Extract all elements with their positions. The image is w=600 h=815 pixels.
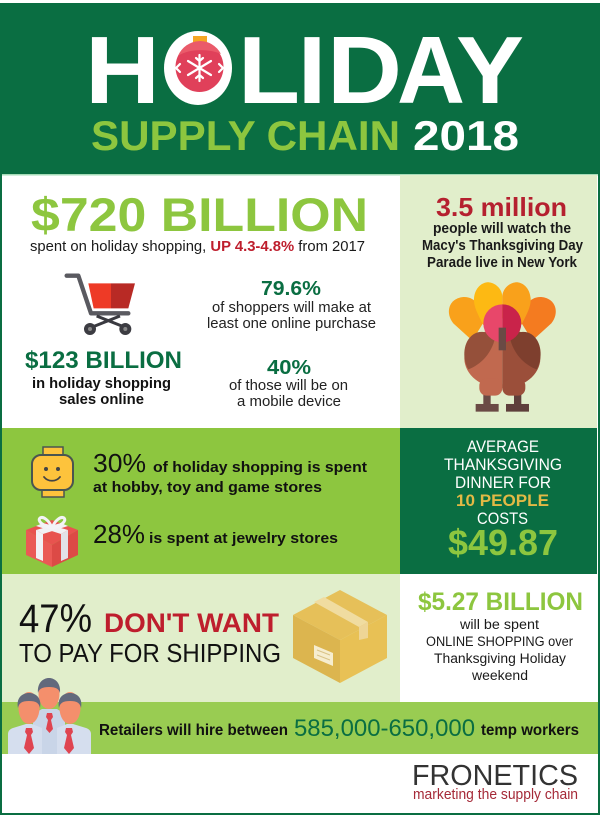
text: online shopping weekend: will be spent <box>459 617 539 632</box>
stat: $123 billion: $123 BILLION <box>25 347 182 374</box>
stat: 40%: a mobile device <box>237 394 341 410</box>
subtitle: SUPPLY CHAIN 2018: 2018 <box>413 112 519 159</box>
logo: Fronetics: FRONETICS <box>412 760 578 792</box>
title: HOLIDAY: I <box>298 17 326 124</box>
stat: 40%: 40% <box>267 357 311 379</box>
text: temp workers hiring: 585,000-650,000 <box>294 715 475 742</box>
stat: 40%: of those will be on <box>229 378 348 394</box>
text: parade viewers: Macy's Thanksgiving Day <box>422 238 583 254</box>
stat: 28% jewelry stores: 28% <box>93 519 145 549</box>
icon: gift box <box>26 517 78 567</box>
panel: Thanksgiving dinner cost: THANKSGIVING <box>444 456 562 474</box>
text: parade viewers: people will watch the <box>433 221 571 237</box>
panel: shipping <box>2 570 400 703</box>
stat: 79.6%: of shoppers will make at <box>212 300 371 316</box>
stat: 30% hobby toy game stores: 30% <box>93 448 146 478</box>
stat: $123 billion <box>25 347 182 408</box>
panel: header <box>2 3 598 174</box>
panel: store spending <box>2 428 400 574</box>
text: online shopping weekend <box>426 617 573 683</box>
text: temp workers hiring: Retailers will hire between <box>99 722 288 739</box>
title: HOLIDAY: L <box>238 17 300 124</box>
stat: 30% hobby toy game stores <box>93 448 367 496</box>
stat: 79.6% <box>207 278 376 332</box>
stat: 47% don't want <box>19 597 281 668</box>
icon: toy head <box>32 447 73 497</box>
panel: Thanksgiving dinner cost: DINNER FOR <box>455 474 551 492</box>
text: spent on holiday shopping: spent on holiday shopping, UP 4.3-4.8% from 2017 <box>30 239 365 255</box>
title: HOLIDAY: H <box>85 17 160 124</box>
icon: shopping cart <box>67 276 135 335</box>
panel: Thanksgiving dinner cost <box>400 428 597 574</box>
subtitle: SUPPLY CHAIN 2018: SUPPLY CHAIN <box>91 112 400 159</box>
stat: 40% <box>229 357 348 410</box>
title: HOLIDAY <box>85 17 524 124</box>
icon: cardboard box <box>293 590 387 683</box>
panel: online shopping weekend <box>400 570 597 703</box>
logo: Fronetics: marketing the supply chain <box>413 786 578 803</box>
title: HOLIDAY: A <box>397 17 465 124</box>
text: online shopping weekend: ONLINE SHOPPING over <box>426 634 573 649</box>
stat: 47% don't want: 47% <box>19 597 92 641</box>
panel: Thanksgiving dinner cost: COSTS <box>477 510 528 528</box>
stat: 79.6%: 79.6% <box>261 278 321 300</box>
panel: Thanksgiving dinner cost: AVERAGE <box>467 438 539 456</box>
stat: 30% hobby toy game stores: of holiday shopping is spent <box>153 459 367 476</box>
title: HOLIDAY: Y <box>456 17 524 124</box>
panel: Thanksgiving dinner cost: 10 PEOPLE <box>456 492 549 510</box>
icon: three workers <box>8 678 91 754</box>
panel: holiday shopping totals <box>2 174 598 428</box>
stat: $5.27 billion: $5.27 BILLION <box>418 588 583 616</box>
text: online shopping weekend: weekend <box>471 668 528 683</box>
icon: red ornament <box>176 36 224 92</box>
stat: 28% jewelry stores: is spent at jewelry stores <box>149 530 338 547</box>
heading: 3.5 million: 3.5 million <box>436 192 567 222</box>
stat: 47% don't want: TO PAY FOR SHIPPING <box>19 638 281 668</box>
stat: 30% hobby toy game stores: at hobby, toy and game stores <box>93 479 322 496</box>
text: temp workers hiring: temp workers <box>481 722 579 739</box>
heading: $720 BILLION: $720 BILLION <box>31 188 368 241</box>
panel: Macy's parade <box>400 175 597 428</box>
stat: $123 billion: in holiday shopping <box>32 375 171 392</box>
stat: 28% jewelry stores <box>93 519 338 549</box>
text: parade viewers: Parade live in New York <box>427 255 578 271</box>
title: HOLIDAY: D <box>327 17 402 124</box>
icon: turkey <box>449 282 556 412</box>
stat: $49.87: $49.87 <box>448 522 558 563</box>
text: parade viewers <box>422 221 583 271</box>
stat: 47% don't want: DON'T WANT <box>104 608 280 638</box>
text: temp workers hiring <box>99 715 579 742</box>
stat: 79.6%: least one online purchase <box>207 316 376 332</box>
text: online shopping weekend: Thanksgiving Holiday <box>434 651 566 666</box>
panel: temp workers <box>2 678 598 754</box>
stat: $123 billion: sales online <box>59 391 144 408</box>
